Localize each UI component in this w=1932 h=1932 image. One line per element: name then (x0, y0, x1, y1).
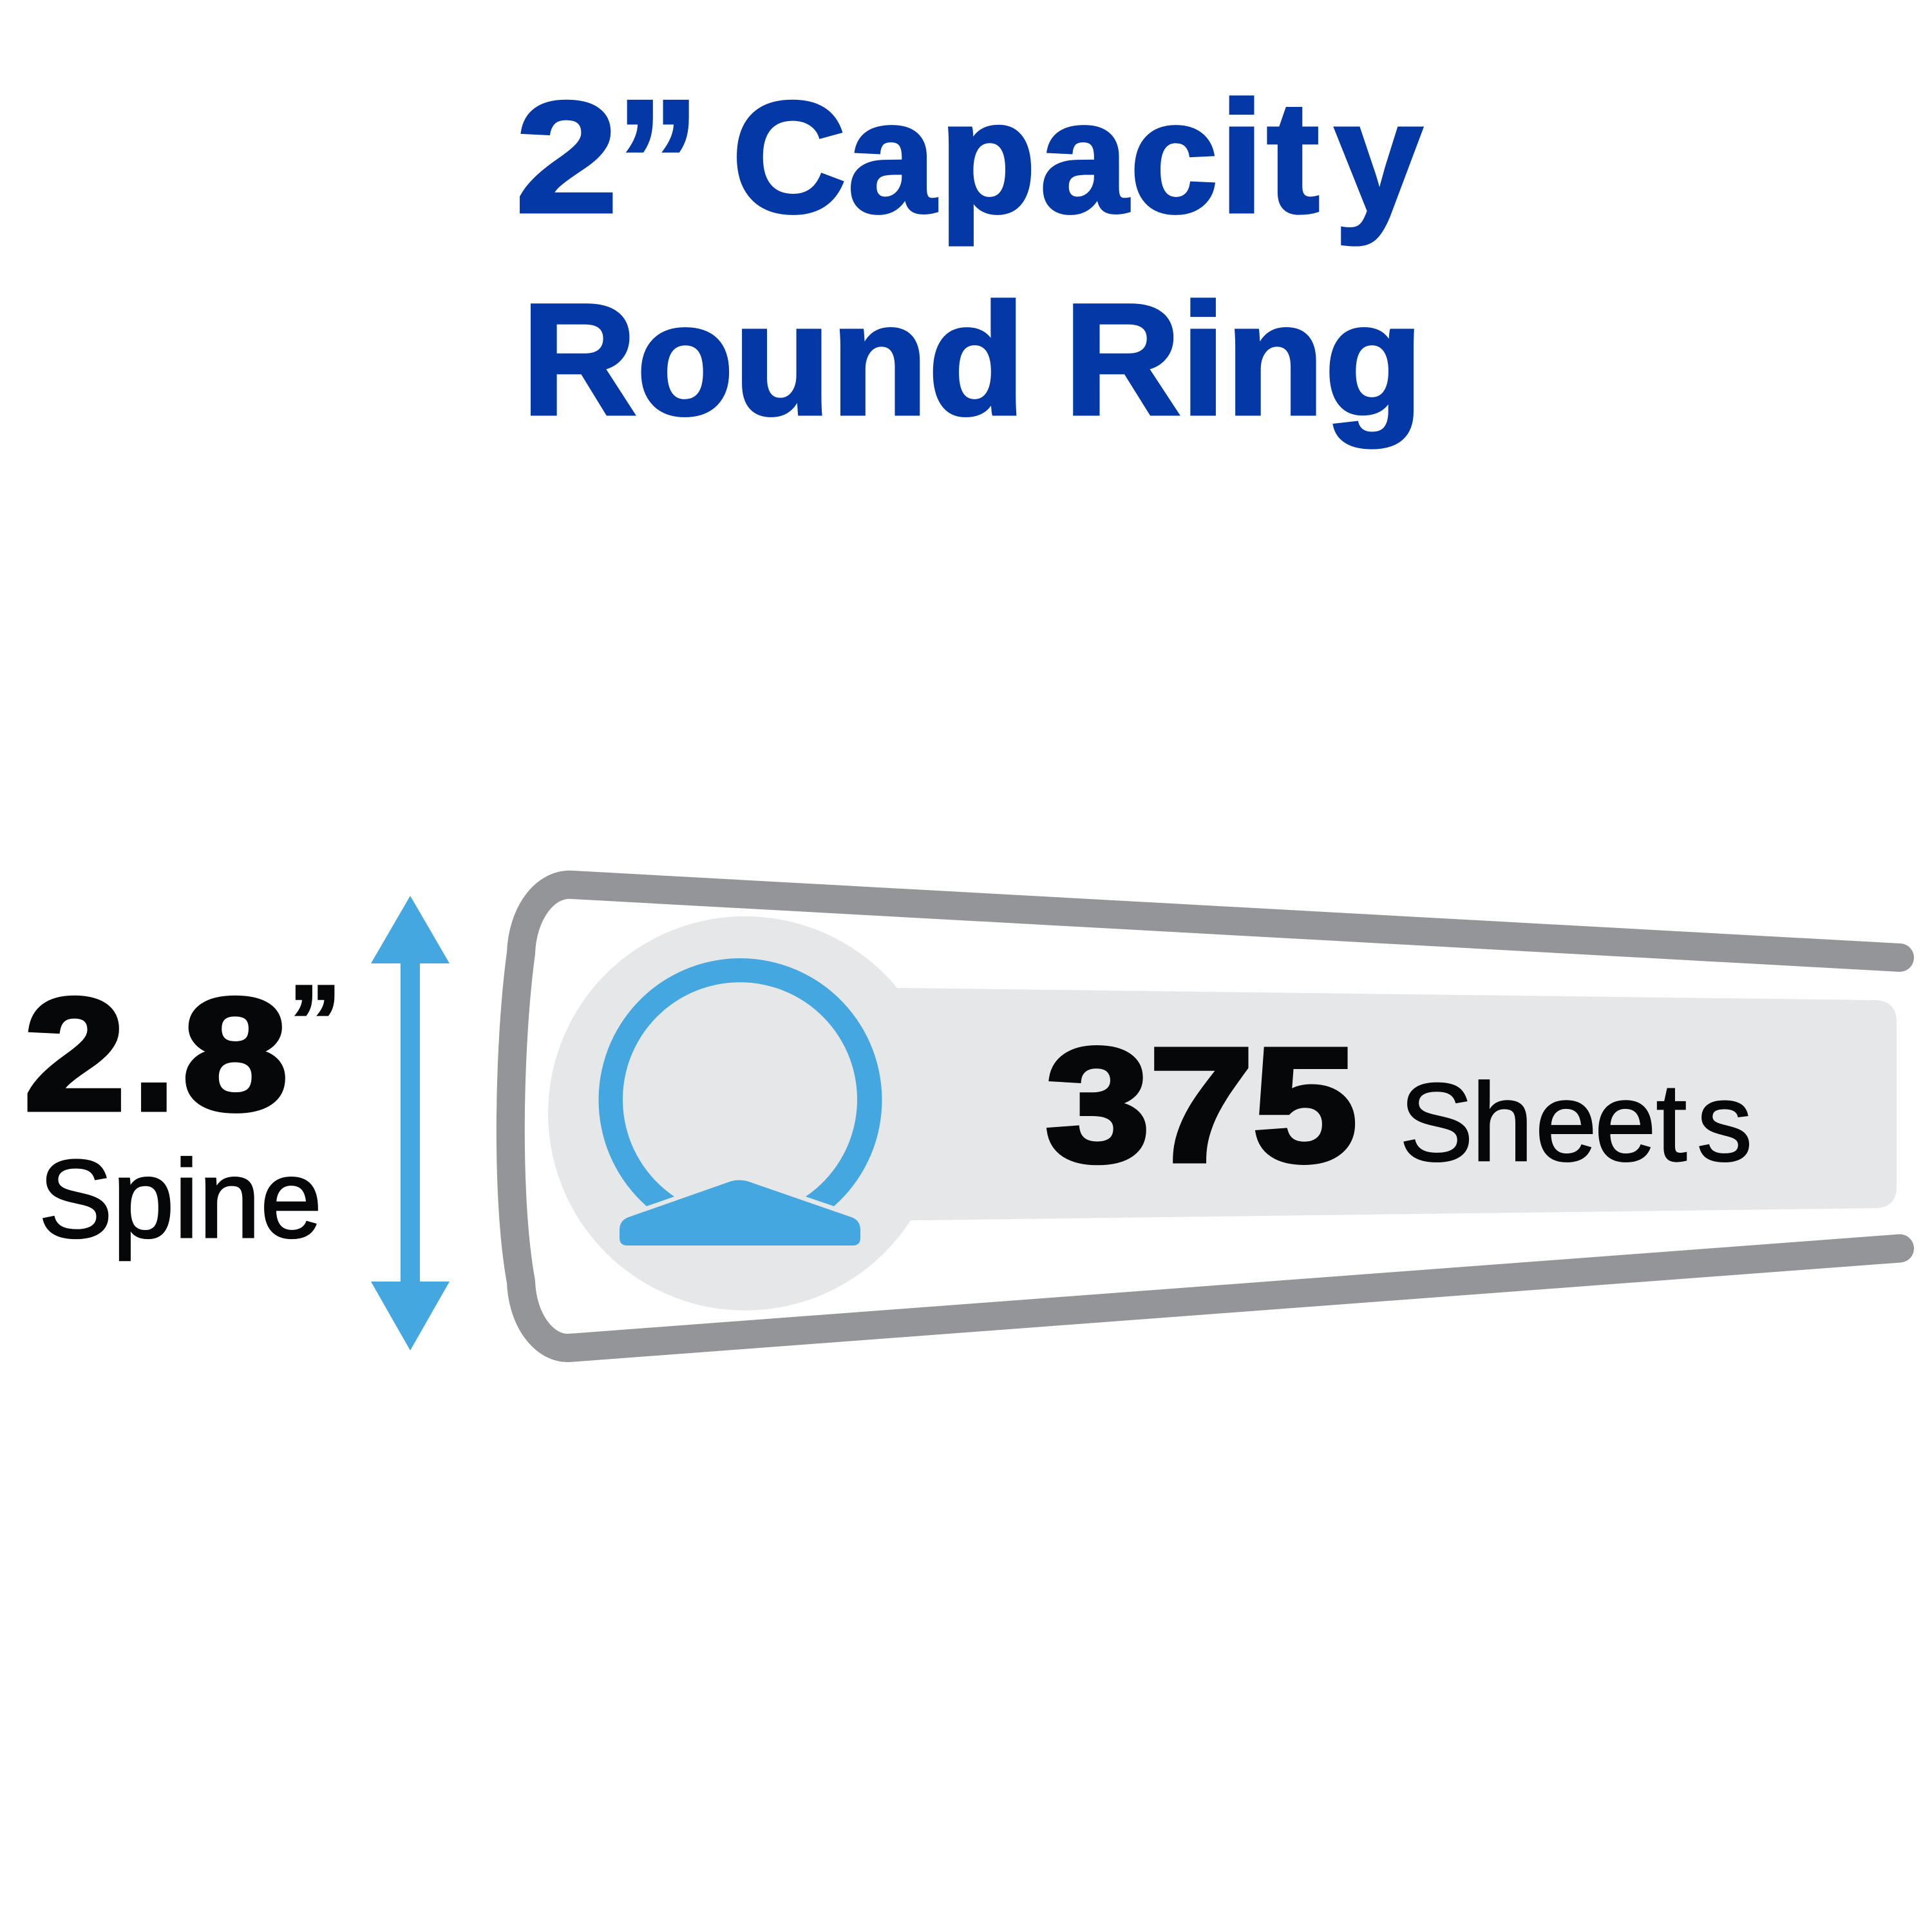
capacity panel (548, 916, 1897, 1311)
ring arc (599, 958, 882, 1206)
title (515, 62, 1423, 448)
title line 2: Ring (1064, 271, 1423, 448)
sheet count (1046, 1015, 1752, 1195)
sheets caption: Sheets (1399, 1061, 1752, 1184)
title line 2 (522, 271, 1423, 448)
title line 1: ” (615, 62, 701, 263)
spine value: 8 (183, 966, 287, 1143)
spine value (24, 963, 341, 1143)
number of sheets: 375 (1046, 1015, 1357, 1195)
binder outline (511, 885, 1900, 1348)
grey circle and tab (548, 916, 1897, 1311)
title line 1: 2 (515, 69, 618, 246)
title line 2: Round (522, 271, 1025, 448)
title line 1: Capacity (732, 69, 1423, 246)
spine caption: Spine (39, 1137, 322, 1261)
spine value: . (134, 966, 174, 1143)
spine value: 2 (24, 966, 125, 1143)
icon: round ring (599, 958, 882, 1245)
spine value: ” (289, 963, 341, 1079)
title line 1 (515, 62, 1423, 263)
spine measurement label (24, 963, 341, 1261)
ring base (620, 1180, 860, 1245)
arrow: spine height (371, 896, 450, 1350)
